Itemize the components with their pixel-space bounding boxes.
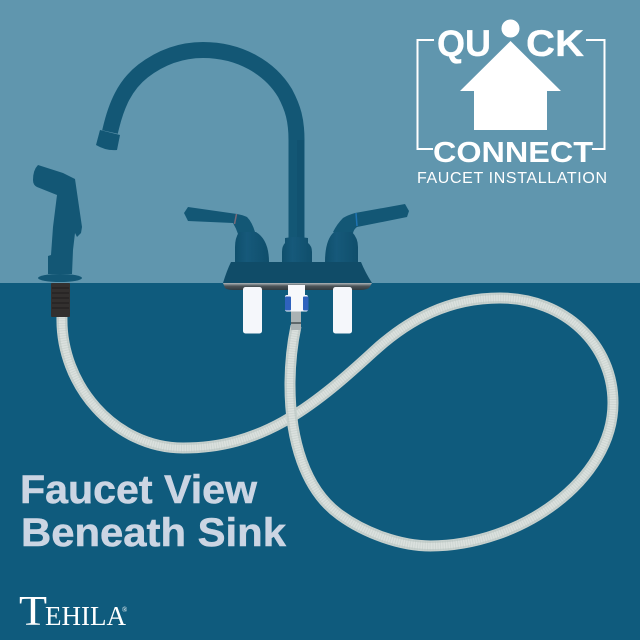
side sprayer <box>33 165 82 317</box>
brand logo: Tehila: ® <box>122 606 128 614</box>
logo subtitle: FAUCET INSTALLATION <box>417 170 607 187</box>
left white tube <box>243 287 262 334</box>
quick connect logo <box>417 20 607 187</box>
heading line 1: Faucet View <box>20 468 258 512</box>
quick connect fitting <box>285 285 308 330</box>
hose: side sprayer section <box>62 298 613 546</box>
logo word: CONNECT: CONNECT <box>433 137 593 169</box>
logo word: CK: CK <box>526 23 584 64</box>
faucet deck plate <box>223 262 372 283</box>
background: counter top <box>0 0 640 283</box>
center collar <box>282 237 312 262</box>
brand logo: Tehila: T <box>19 589 47 635</box>
right handle <box>325 204 409 262</box>
logo dot <box>502 20 520 38</box>
left handle <box>184 207 269 262</box>
hose: faucet connection section <box>290 326 431 546</box>
logo word: QU: QU <box>437 23 491 64</box>
faucet spout <box>96 50 304 250</box>
heading line 2: Beneath Sink <box>21 511 287 555</box>
brand logo: Tehila <box>19 589 128 635</box>
brand logo: Tehila: EHILA <box>45 601 126 631</box>
logo house icon <box>460 41 561 130</box>
chrome underside <box>223 283 372 290</box>
logo bracket <box>418 40 604 149</box>
background: beneath sink <box>0 283 640 640</box>
heading <box>20 468 287 555</box>
right white tube <box>333 287 352 334</box>
